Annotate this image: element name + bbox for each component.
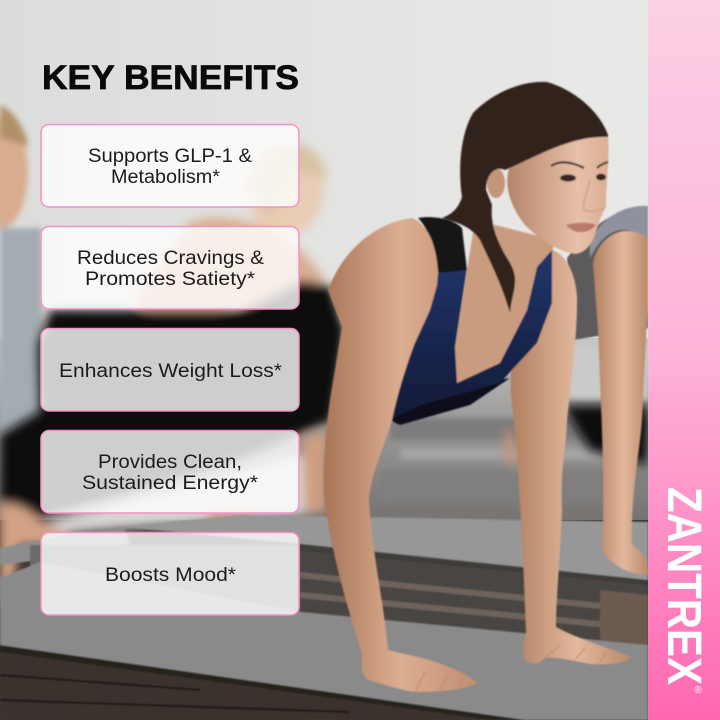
far arm <box>511 250 631 664</box>
navy tank top <box>390 250 552 420</box>
card: Provides Clean, Sustained Energy: Sustained Energy* <box>82 473 259 494</box>
main woman in plank pose <box>324 82 631 692</box>
card: Supports GLP-1 and Metabolism: Metabolism* <box>111 167 221 188</box>
ear <box>487 168 505 198</box>
card: Reduces Cravings and Promotes Satiety: Promotes Satiety* <box>85 269 256 290</box>
card: Provides Clean, Sustained Energy: Provides Clean, <box>98 452 242 473</box>
eyes, brows, lips <box>551 162 608 232</box>
near arm and shoulder <box>324 218 477 692</box>
floor streaks in distance <box>388 348 648 462</box>
card: Boosts Mood <box>41 532 299 615</box>
card: Supports GLP-1 and Metabolism <box>41 124 299 207</box>
card: Enhances Weight Loss: Enhances Weight Loss* <box>59 361 283 382</box>
brand wordmark: ZANTREX <box>657 487 710 685</box>
title: KEY BENEFITS <box>42 59 299 97</box>
dark strap <box>418 217 467 273</box>
neck and chest <box>455 220 555 383</box>
dark lower torso <box>390 378 510 425</box>
finger lines <box>415 645 606 692</box>
hair <box>442 82 608 313</box>
card: Provides Clean, Sustained Energy <box>41 430 299 513</box>
yoga mats and wooden floor <box>0 515 648 720</box>
card: Enhances Weight Loss <box>41 328 299 411</box>
registered mark: ® <box>694 685 702 696</box>
card: Boosts Mood: Boosts Mood* <box>105 565 237 586</box>
pink brand sidebar <box>648 0 720 720</box>
blurred background classmates <box>0 105 42 435</box>
card: Reduces Cravings and Promotes Satiety: Reduces Cravings & <box>77 248 264 269</box>
background person on the right <box>567 206 648 575</box>
card: Reduces Cravings and Promotes Satiety <box>41 226 299 309</box>
blurred second woman and dark leggings <box>0 144 648 602</box>
face <box>507 134 609 254</box>
photo: yoga class background <box>0 80 648 720</box>
card: Supports GLP-1 and Metabolism: Supports GLP-1 & <box>88 146 252 167</box>
